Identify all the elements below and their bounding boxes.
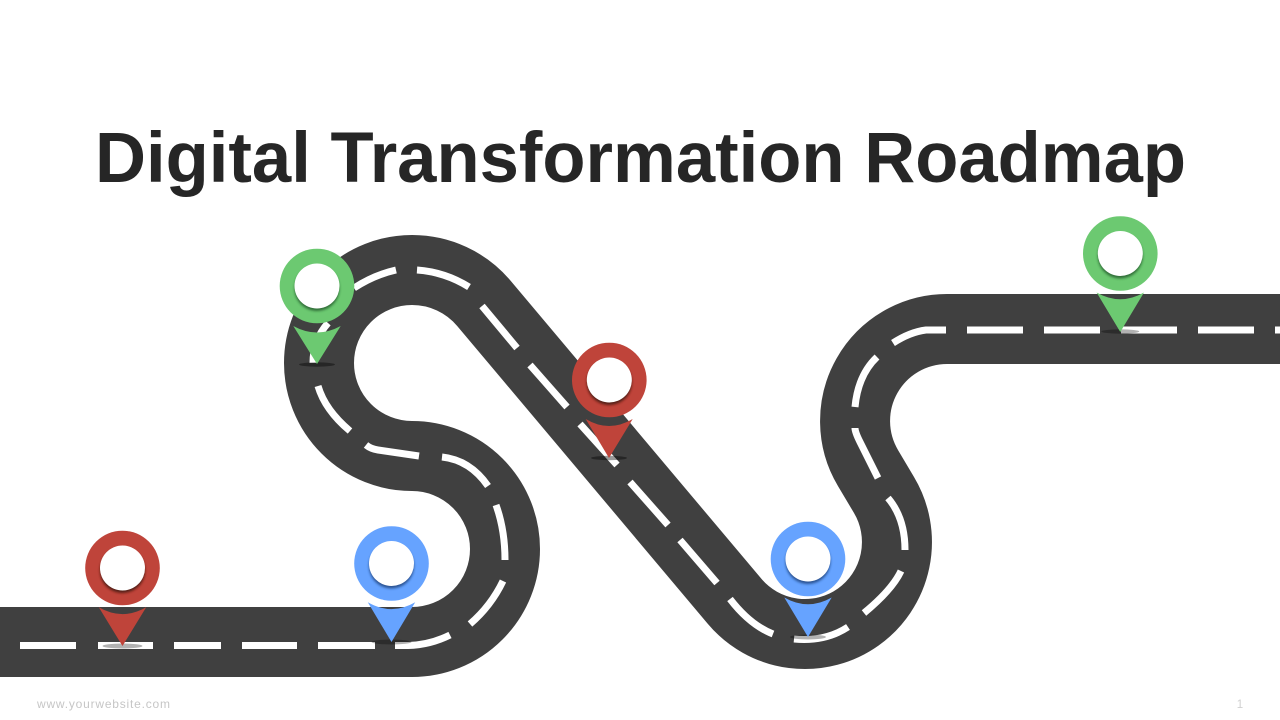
- pin 3: green: [280, 249, 354, 367]
- pin 6: green: [1083, 216, 1158, 334]
- pin 1: red: [85, 531, 160, 648]
- footer website: www.yourwebsite.com: [36, 697, 170, 711]
- lane dashes: [20, 270, 1280, 646]
- page number: 1: [1237, 699, 1243, 711]
- pin 5: blue: [771, 522, 845, 640]
- title: Digital Transformation Roadmap: [95, 119, 1186, 198]
- road: [0, 270, 1280, 646]
- road surface: [0, 270, 1280, 642]
- pin 4: red: [572, 343, 647, 460]
- pin 2: blue: [354, 526, 429, 644]
